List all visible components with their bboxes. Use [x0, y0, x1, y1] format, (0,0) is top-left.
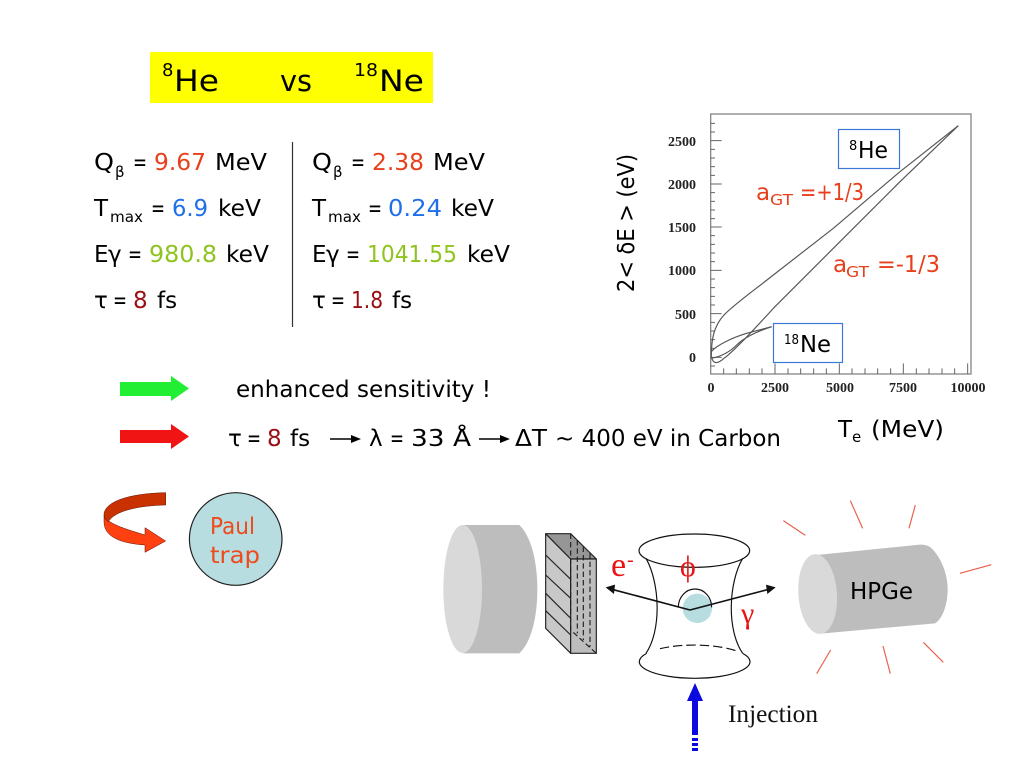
text block: 8He properties: fs	[157, 288, 177, 314]
x axis title	[837, 417, 944, 446]
y tick labels: 2500	[668, 135, 696, 150]
title: Ne	[379, 64, 424, 98]
diagram: HPGe detector	[783, 501, 991, 674]
diagram: ion trap	[639, 534, 750, 678]
y tick labels: 2000	[668, 178, 696, 193]
text block: 8He properties: 6.9	[172, 196, 208, 222]
text block: 18Ne properties: 1041.55	[367, 242, 457, 268]
label: electron: -	[627, 549, 634, 571]
label: electron	[611, 547, 634, 584]
text block: 18Ne properties: =	[368, 196, 382, 222]
text block: 18Ne properties: 2.38	[372, 150, 424, 176]
chart: energy shift vs electron energy	[614, 114, 986, 446]
text block: 8He properties: τ	[94, 288, 108, 314]
text block: 8He properties: =	[151, 196, 165, 222]
text block: 8He properties: =	[133, 150, 147, 176]
diagram: HPGe detector: HPGe	[850, 579, 913, 605]
text block: 8He properties: keV	[226, 242, 269, 268]
text block: 8He properties: Q	[94, 150, 114, 176]
y tick labels	[668, 135, 696, 366]
x tick labels: 5000	[826, 381, 854, 396]
text block: 18Ne properties: =	[351, 150, 365, 176]
label: aGT plus: =+1/3	[800, 180, 864, 206]
title: 18	[354, 60, 378, 81]
text block: 8He properties: E	[94, 242, 109, 268]
text block: 8He properties: 980.8	[149, 242, 217, 268]
label: 8He box	[838, 130, 900, 168]
y tick labels: 1500	[668, 221, 696, 236]
text block: 18Ne properties	[311, 150, 510, 314]
title: 8	[162, 60, 173, 81]
x tick labels: 2500	[761, 381, 789, 396]
text block: 18Ne properties: 0.24	[388, 196, 442, 222]
label: aGT minus: GT	[846, 263, 870, 281]
text: lifetime chain: =	[247, 426, 261, 452]
red arrow	[120, 424, 189, 449]
title: vs	[280, 64, 312, 98]
x tick labels: 7500	[889, 381, 917, 396]
icon: curved arrow	[104, 493, 166, 552]
plot frame and curves	[711, 114, 971, 374]
text block: 8He properties	[93, 150, 269, 314]
text block: 18Ne properties: 1.8	[351, 288, 383, 314]
text block: 18Ne properties: max	[328, 208, 361, 226]
label: electron: e	[611, 547, 626, 584]
text: lifetime chain: ~ 400 eV in Carbon	[555, 426, 781, 452]
green arrow	[120, 376, 189, 401]
text block: 18Ne properties: keV	[467, 242, 510, 268]
x axis title: e	[852, 428, 861, 446]
x tick labels	[708, 381, 986, 396]
diagram: detector cylinder	[443, 525, 537, 653]
x tick labels: 10000	[950, 381, 986, 396]
Paul trap circle: Paul	[210, 514, 255, 540]
text block: 18Ne properties: β	[333, 163, 343, 181]
text block: 18Ne properties: keV	[451, 196, 494, 222]
text block: 18Ne properties: MeV	[433, 150, 485, 176]
title: He	[174, 64, 219, 98]
y tick labels: 1000	[668, 264, 696, 279]
label: gamma: γ	[740, 597, 754, 630]
text block: 8He properties: =	[113, 288, 127, 314]
text block: 8He properties: γ	[108, 242, 122, 268]
label: 8He box: He	[858, 138, 888, 164]
text block: 18Ne properties: fs	[392, 288, 412, 314]
label: aGT minus: a	[833, 252, 847, 278]
text: injection: Injection	[728, 701, 819, 728]
arrow: injection	[687, 683, 703, 751]
text: lifetime chain: 33 Å	[411, 424, 471, 452]
text: enhanced sensitivity: enhanced sensitivity !	[236, 377, 491, 403]
text: lifetime chain	[228, 424, 781, 452]
text block: 18Ne properties: T	[311, 196, 327, 222]
label: phi: ϕ	[680, 550, 696, 583]
label: 18Ne box: 18	[784, 333, 799, 348]
arrows: decay products	[606, 585, 776, 610]
y axis title: 2< δE > (eV)	[614, 154, 640, 292]
y tick labels: 500	[675, 308, 696, 323]
text block: 18Ne properties: =	[331, 288, 345, 314]
text block: 8He properties: 9.67	[154, 150, 206, 176]
x tick labels: 0	[708, 381, 714, 396]
x axis title: T	[837, 417, 853, 443]
Paul trap circle: trap	[210, 543, 260, 569]
text block: 18Ne properties: E	[312, 242, 327, 268]
text: lifetime chain: =	[390, 426, 404, 452]
label: aGT plus: a	[756, 180, 770, 206]
text block: 8He properties: max	[110, 208, 143, 226]
text block: 18Ne properties: γ	[326, 242, 340, 268]
text: lifetime chain: ΔT	[515, 426, 548, 452]
label: 18Ne box	[774, 324, 842, 362]
label: 18Ne box: Ne	[800, 332, 831, 358]
x axis title: (MeV)	[871, 417, 944, 443]
label: 8He box: 8	[849, 139, 857, 154]
text block: 18Ne properties: τ	[312, 288, 326, 314]
text block: 8He properties: T	[93, 196, 109, 222]
y tick labels: 0	[689, 351, 696, 366]
text: lifetime chain: τ	[228, 426, 242, 452]
text block: 8He properties: 8	[133, 288, 148, 314]
text block: 8He properties: MeV	[215, 150, 267, 176]
text: lifetime chain: fs	[290, 426, 310, 452]
text block: 8He properties: =	[128, 242, 142, 268]
label: aGT plus	[756, 180, 864, 209]
label: aGT plus: GT	[770, 191, 794, 209]
text block: 8He properties: β	[115, 163, 125, 181]
divider	[292, 142, 294, 327]
label: aGT minus	[833, 252, 940, 281]
title	[150, 52, 433, 103]
Paul trap circle	[189, 493, 282, 585]
text: lifetime chain: λ	[369, 426, 383, 452]
text: lifetime chain: 8	[267, 426, 282, 452]
text block: 18Ne properties: =	[346, 242, 360, 268]
text block: 8He properties: keV	[218, 196, 261, 222]
text block: 18Ne properties: Q	[312, 150, 332, 176]
label: aGT minus: =-1/3	[877, 252, 940, 278]
diagram: segmented box	[546, 534, 596, 653]
